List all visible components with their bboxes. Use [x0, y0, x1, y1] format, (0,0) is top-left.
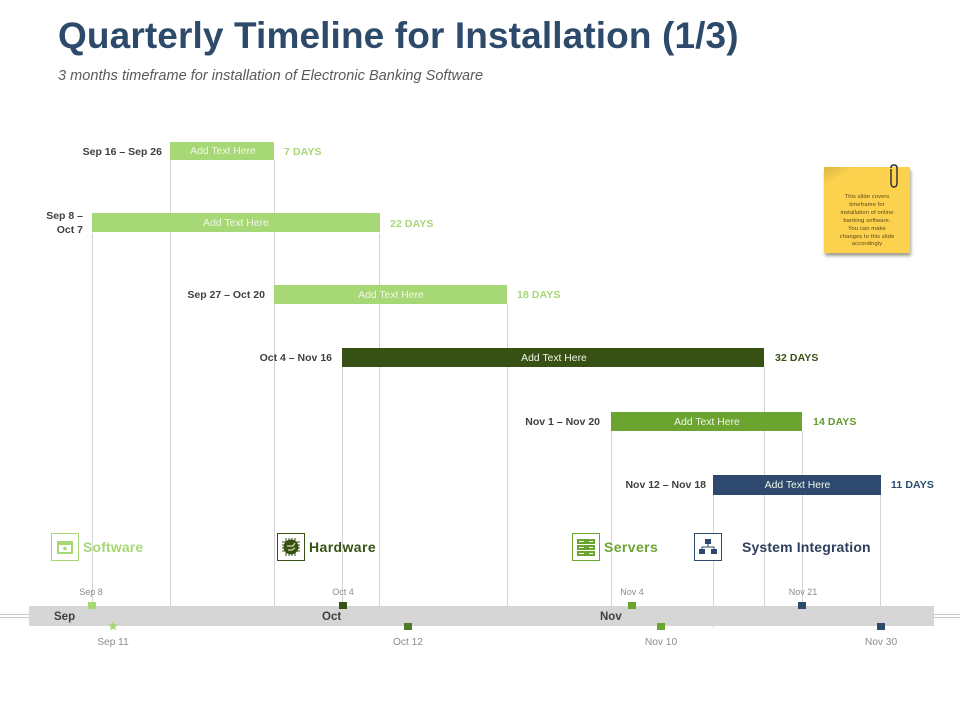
milestone Sep 11 label: Sep 11	[97, 637, 129, 648]
task 2 date range: Oct 7	[57, 224, 83, 236]
task 4 date range: Oct 4 – Nov 16	[260, 352, 332, 364]
task 5 bar: Add Text Here	[674, 417, 740, 428]
sticky note text: You can make	[848, 226, 886, 232]
milestone Nov 21 marker	[798, 602, 806, 609]
axis band	[29, 606, 934, 626]
task 6 bar	[713, 475, 881, 495]
task 2 bar	[92, 213, 380, 232]
milestone Nov 21 label: Nov 21	[789, 587, 817, 597]
task 1 bar: Add Text Here	[190, 146, 256, 157]
task 3 bar	[274, 285, 507, 304]
label: Servers: Servers	[604, 539, 658, 555]
task 3 bar: Add Text Here	[358, 290, 424, 301]
task 1 bar	[170, 142, 274, 160]
task 5 bar	[611, 412, 802, 431]
milestone Nov 30 marker	[877, 623, 885, 630]
milestone Oct 4 label: Oct 4	[332, 587, 354, 597]
milestone Oct 12 marker	[404, 623, 412, 630]
timeline axis	[0, 587, 960, 648]
task 2 bar: Add Text Here	[203, 218, 269, 229]
task 2 date range: Sep 8 –	[46, 210, 83, 222]
sticky note	[824, 167, 910, 253]
milestone Nov 4 marker	[628, 602, 636, 609]
sticky note text: accordingly	[852, 241, 882, 247]
label: System Integration: System Integration	[742, 539, 871, 555]
task 1 duration: 7 DAYS	[284, 146, 322, 158]
icon: software window	[51, 533, 79, 561]
milestone Oct 12 label: Oct 12	[393, 637, 423, 648]
subtitle: 3 months timeframe for installation of Electronic Banking Software	[58, 68, 483, 84]
task 5 duration: 14 DAYS	[813, 416, 857, 428]
task 2 date range	[46, 210, 83, 236]
legend: Servers	[572, 533, 658, 561]
task 3 date range: Sep 27 – Oct 20	[187, 289, 265, 301]
icon: chip	[277, 533, 305, 561]
task 2 duration: 22 DAYS	[390, 218, 434, 230]
label: Hardware: Hardware	[309, 539, 376, 555]
task 4 bar	[342, 348, 764, 367]
axis side lines	[0, 614, 960, 618]
task 3 duration: 18 DAYS	[517, 289, 561, 301]
legend: Hardware	[277, 533, 376, 561]
task 5 date range: Nov 1 – Nov 20	[525, 416, 600, 428]
icon: server stack	[572, 533, 600, 561]
month Sep: Sep	[54, 611, 75, 623]
task 6 date range: Nov 12 – Nov 18	[625, 479, 706, 491]
legend: Software	[51, 533, 143, 561]
sticky note text: This slide covers	[845, 194, 889, 200]
task 4 bar: Add Text Here	[521, 353, 587, 364]
milestone Sep 8 marker	[88, 602, 96, 609]
month Oct: Oct	[322, 611, 341, 623]
milestone Nov 4 label: Nov 4	[620, 587, 644, 597]
milestone Oct 4 marker	[339, 602, 347, 609]
task 4 duration: 32 DAYS	[775, 352, 819, 364]
legend: System Integration	[694, 533, 871, 561]
sticky note text: changes to this slide	[840, 234, 894, 240]
icon: network	[694, 533, 722, 561]
sticky note text: timeframe for	[849, 202, 885, 208]
milestone Nov 30 label: Nov 30	[865, 637, 897, 648]
milestone Nov 10 marker	[657, 623, 665, 630]
task 6 duration: 11 DAYS	[891, 479, 934, 491]
milestone Sep 8 label: Sep 8	[79, 587, 103, 597]
sticky note text: installation of online	[840, 210, 894, 216]
title: Quarterly Timeline for Installation (1/3)	[58, 15, 739, 56]
milestone Nov 10 label: Nov 10	[645, 637, 677, 648]
milestone Sep 11 star	[108, 621, 118, 630]
task 6 bar: Add Text Here	[765, 480, 830, 491]
sticky note text	[840, 194, 894, 247]
month Nov: Nov	[600, 611, 622, 623]
icon: paper clip	[890, 164, 898, 188]
label: Software: Software	[83, 539, 143, 555]
task 1 date range: Sep 16 – Sep 26	[83, 146, 162, 158]
sticky note text: banking software.	[843, 218, 891, 224]
